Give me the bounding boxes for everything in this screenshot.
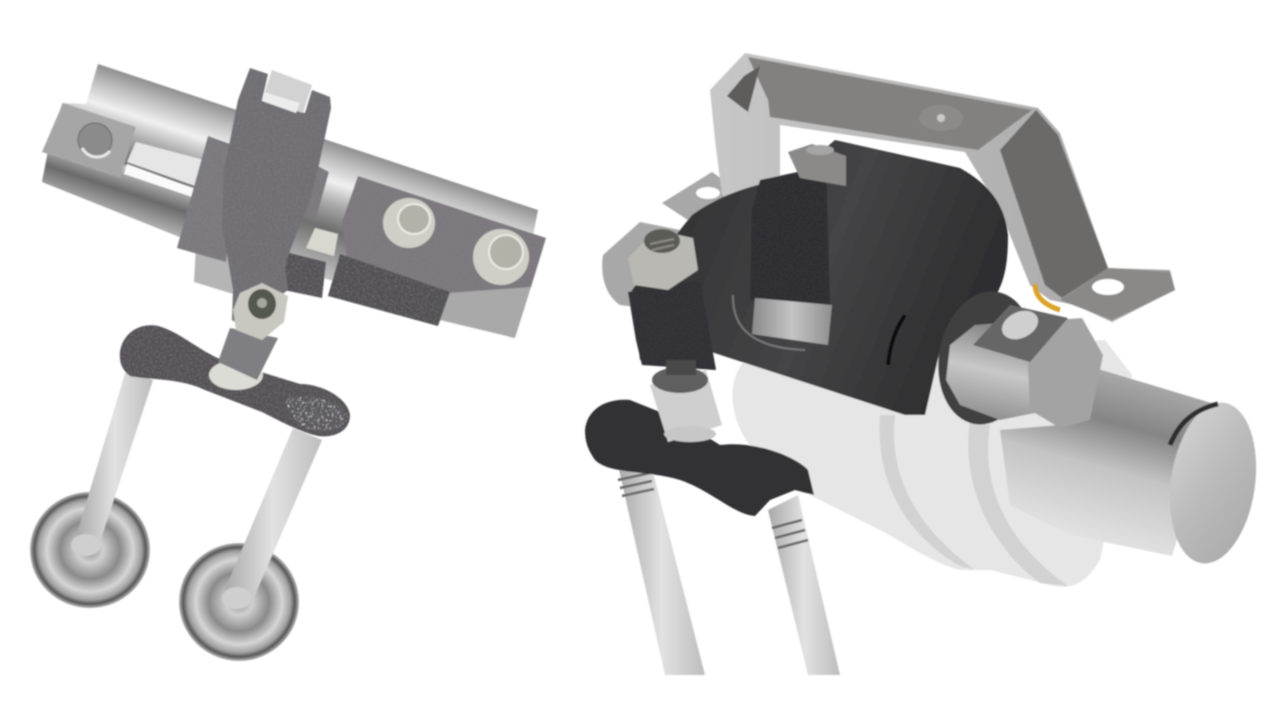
silver block behind bolt bbox=[602, 222, 690, 310]
metal bracket bbox=[710, 53, 1175, 322]
mounting boss one bbox=[383, 198, 435, 248]
mounting boss two bbox=[473, 229, 529, 285]
right mounting block bbox=[306, 176, 546, 338]
left bridge bbox=[120, 325, 350, 436]
collar washer bbox=[928, 284, 1044, 432]
left assembly bbox=[30, 64, 546, 661]
left shaft lower section bbox=[42, 140, 200, 238]
right assembly bbox=[585, 53, 1266, 675]
rocker arm bbox=[222, 68, 331, 325]
shaft hexagonal end bbox=[946, 284, 1103, 428]
valve stems bbox=[618, 460, 840, 675]
block front face bbox=[328, 254, 450, 326]
lower bracket ear bbox=[662, 172, 726, 232]
adjuster nut bbox=[209, 283, 288, 390]
left valve stems and heads bbox=[30, 370, 322, 661]
rocker tip bbox=[628, 280, 716, 370]
bridge speckle bbox=[285, 396, 348, 432]
translucent cam lobes bbox=[732, 340, 1132, 587]
textured pillar bbox=[750, 166, 830, 305]
left end flat with hole bbox=[42, 103, 204, 198]
shaft end face bbox=[1160, 397, 1266, 569]
main shaft bbox=[1000, 368, 1218, 556]
tip bolt bbox=[628, 229, 698, 290]
right bridge bbox=[585, 400, 814, 516]
roller bbox=[752, 298, 832, 345]
top bolt bbox=[788, 144, 846, 186]
left collar bbox=[177, 136, 329, 296]
left camshaft bbox=[42, 64, 538, 338]
dark rocker body bbox=[628, 140, 1008, 415]
right adjuster stem bbox=[650, 360, 722, 442]
